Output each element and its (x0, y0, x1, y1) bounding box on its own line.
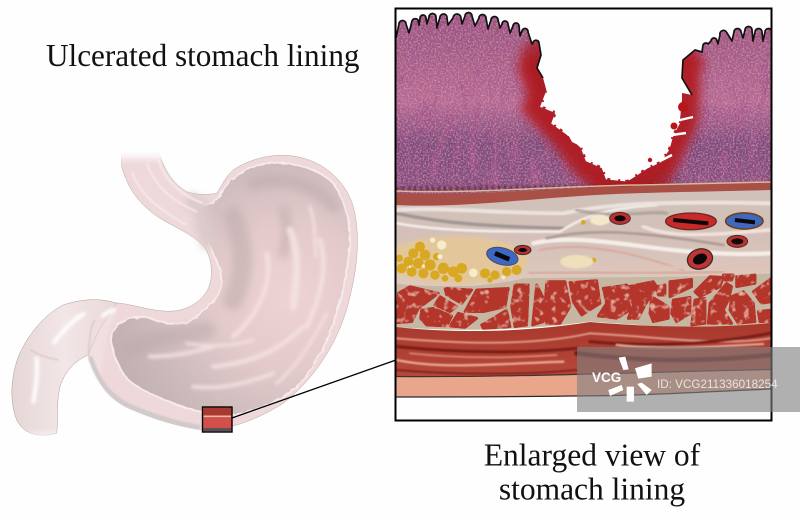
muscularis mucosae band (396, 182, 771, 206)
cavity dark folds (130, 181, 333, 350)
ulcer crater fringe (542, 93, 693, 180)
connector line (232, 360, 396, 418)
soft blend between esophagus and cavity (187, 199, 211, 247)
mucosa outline (396, 13, 772, 95)
serosa layer (396, 370, 771, 397)
title: ulcerated stomach lining: Ulcerated stomach lining (46, 38, 360, 73)
outer wall shading (90, 357, 200, 427)
watermark: ID: VCG211336018254 (657, 378, 778, 391)
stomach illustration (0, 120, 357, 462)
circular muscle layer (390, 273, 773, 330)
blood vessels (485, 212, 763, 272)
mucosa basal fringe (396, 184, 771, 190)
submucosa (385, 184, 771, 290)
stomach cavity (111, 163, 350, 415)
rugae folds (150, 207, 327, 388)
stomach wall (88, 150, 357, 430)
watermark logo petals (608, 357, 652, 402)
panel border (396, 8, 772, 420)
watermark: VCG (592, 370, 621, 385)
esophagus folds (132, 160, 203, 225)
fades at open ends (107, 120, 173, 158)
ulcer red bleed (537, 50, 695, 180)
caption: enlarged view of stomach lining: Enlarged view of (484, 438, 701, 472)
caption: enlarged view of stomach lining: stomach lining (499, 472, 685, 506)
inset sample box (202, 407, 232, 432)
mucosa layer (396, 9, 772, 199)
enlarged view panel (385, 9, 773, 397)
caption: enlarged view of stomach lining (484, 438, 701, 506)
duodenum (12, 300, 117, 435)
longitudinal muscle layer (396, 322, 771, 377)
watermark (577, 347, 800, 412)
fat cells (385, 212, 763, 284)
